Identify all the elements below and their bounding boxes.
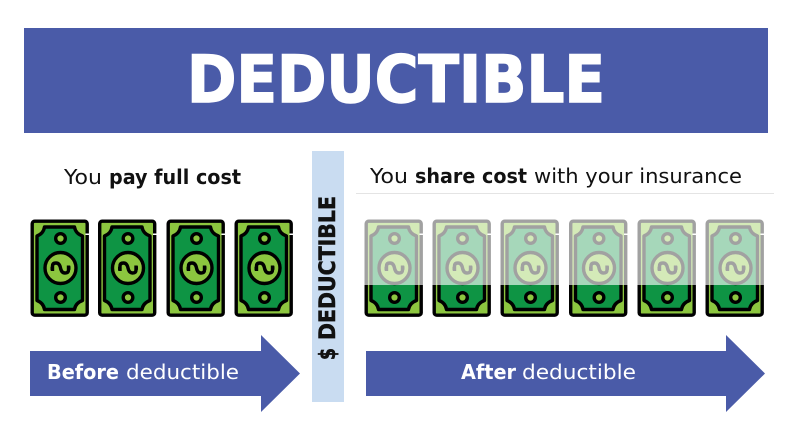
vertical band: deductible: $	[316, 348, 341, 360]
title banner	[24, 28, 768, 133]
arrow: before deductible: deductible	[126, 360, 239, 384]
arrow: before deductible	[30, 335, 300, 412]
heading: you pay full cost: You	[63, 165, 102, 189]
icons: bills before deductible	[32, 221, 293, 315]
heading: you share cost with your insurance: You	[369, 164, 408, 188]
heading: you share cost with your insurance: with your insurance	[534, 164, 742, 188]
icons: bills after deductible	[360, 216, 770, 315]
arrow: after deductible: deductible	[522, 360, 636, 384]
arrow: before deductible: Before	[47, 360, 119, 384]
heading: you share cost with your insurance: share cost	[415, 164, 527, 188]
vertical band: deductible: DEDUCTIBLE	[316, 196, 341, 340]
arrow: after deductible	[366, 335, 765, 412]
vertical band: deductible	[312, 151, 344, 402]
arrow: after deductible: After	[461, 360, 516, 384]
title banner: DEDUCTIBLE	[187, 43, 605, 118]
heading: you pay full cost: pay full cost	[109, 165, 241, 189]
heading: you share cost with your insurance	[356, 164, 774, 194]
